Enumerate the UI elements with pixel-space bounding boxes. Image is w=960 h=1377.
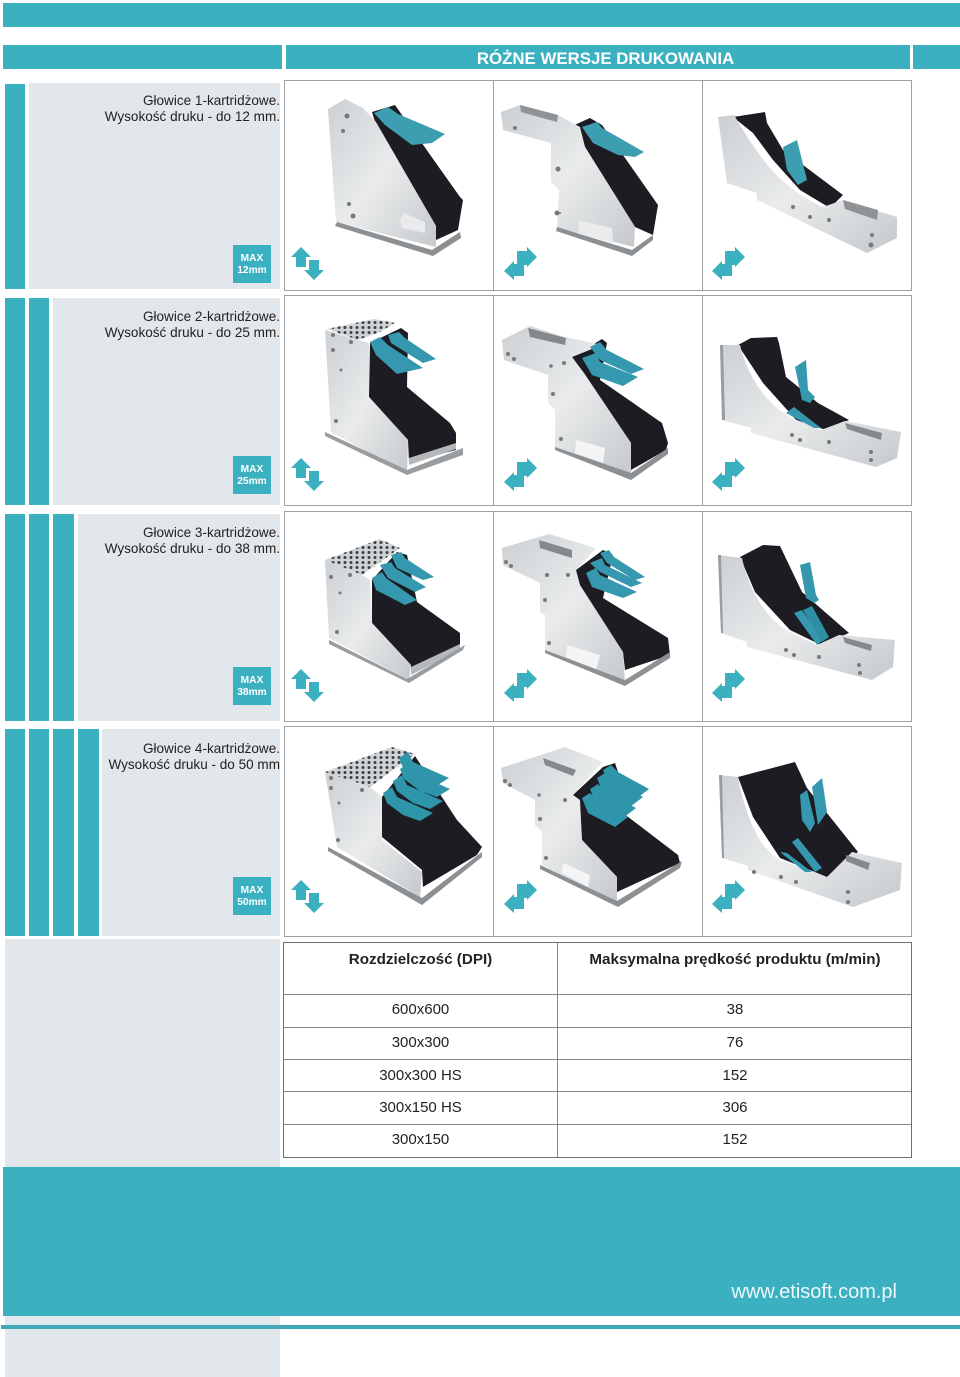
speed value: 152 bbox=[722, 1131, 748, 1148]
row 2 MAX badge: 25mm bbox=[237, 476, 267, 487]
column divider bbox=[557, 943, 558, 1157]
resolution value: 300x150 HS bbox=[379, 1099, 462, 1116]
row 1 MAX badge: MAX bbox=[241, 253, 263, 264]
footer band with website bbox=[3, 1167, 960, 1316]
resolution value: 300x300 HS bbox=[379, 1067, 462, 1084]
row 2 text bbox=[104, 309, 280, 340]
row 3 text: Głowice 3-kartridżowe. bbox=[143, 525, 280, 540]
row 1 text bbox=[104, 93, 280, 124]
print head photo bbox=[718, 112, 897, 253]
table row 5 bbox=[284, 1124, 911, 1157]
icon: horizontal arrows bbox=[712, 880, 745, 913]
bottom left grey strip bbox=[5, 1316, 280, 1377]
header bar left bbox=[3, 45, 282, 69]
print head photo bbox=[501, 747, 682, 907]
row 3 text: Wysokość druku - do 38 mm. bbox=[105, 541, 280, 556]
title: RÓŻNE WERSJE DRUKOWANIA: RÓŻNE WERSJE DRUKOWANIA bbox=[477, 49, 734, 68]
cell: 3 cartridges, horizontal bbox=[493, 511, 703, 722]
icon: horizontal arrows bbox=[712, 458, 745, 491]
header: max speed: Maksymalna prędkość produktu (m/min) bbox=[589, 951, 881, 968]
row 2 text: Głowice 2-kartridżowe. bbox=[143, 309, 280, 324]
row 4 text: Wysokość druku - do 50 mm bbox=[108, 757, 280, 772]
row 3 description panel bbox=[78, 514, 280, 721]
icon: vertical arrows bbox=[291, 247, 324, 280]
cell: 4 cartridges, vertical bbox=[284, 726, 494, 937]
row 3 text bbox=[104, 525, 280, 556]
icon: horizontal arrows bbox=[712, 247, 745, 280]
print head photo bbox=[325, 319, 463, 475]
row 1 cartridge stripes bbox=[5, 84, 25, 289]
row 2 cartridge stripes bbox=[5, 298, 49, 505]
speed value: 38 bbox=[727, 1001, 743, 1018]
speed value: 152 bbox=[722, 1067, 748, 1084]
print head photo bbox=[720, 337, 901, 467]
icon: horizontal arrows bbox=[504, 247, 537, 280]
table row 1 bbox=[284, 994, 911, 1027]
title: RÓŻNE WERSJE DRUKOWANIA bbox=[286, 45, 910, 69]
print head photo bbox=[502, 534, 670, 686]
table: resolution and product speed bbox=[283, 942, 912, 1158]
row 1 MAX badge: 12mm bbox=[237, 265, 267, 276]
cell: 1 cartridge, curved bbox=[702, 80, 912, 291]
cell: 1 cartridge, horizontal bbox=[493, 80, 703, 291]
row 4 MAX badge: MAX bbox=[241, 885, 263, 896]
speed value: 306 bbox=[722, 1099, 748, 1116]
header: resolution: Rozdzielczość (DPI) bbox=[349, 951, 492, 968]
print head photo bbox=[328, 99, 463, 256]
icon: vertical arrows bbox=[291, 669, 324, 702]
icon: horizontal arrows bbox=[504, 669, 537, 702]
row 3 MAX badge bbox=[233, 667, 271, 705]
icon: horizontal arrows bbox=[504, 458, 537, 491]
lower left grey panel bbox=[5, 939, 280, 1167]
row 3 MAX badge: MAX bbox=[241, 675, 263, 686]
row 3 MAX badge: 38mm bbox=[237, 687, 267, 698]
icon: horizontal arrows bbox=[712, 669, 745, 702]
table row 3 bbox=[284, 1059, 911, 1091]
print head photo bbox=[502, 326, 668, 480]
row 4 cartridge stripes bbox=[5, 729, 99, 936]
resolution value: 600x600 bbox=[392, 1001, 449, 1018]
row 4 MAX badge bbox=[233, 877, 271, 915]
icon: vertical arrows bbox=[291, 458, 324, 491]
row 1 text: Wysokość druku - do 12 mm. bbox=[105, 109, 280, 124]
print head photo bbox=[325, 539, 465, 683]
cell: 2 cartridges, curved bbox=[702, 295, 912, 506]
row 2 text: Wysokość druku - do 25 mm. bbox=[105, 325, 280, 340]
row 4 text bbox=[108, 741, 280, 772]
row 4 MAX badge: 50mm bbox=[237, 897, 267, 908]
website address: www.etisoft.com.pl bbox=[731, 1281, 897, 1303]
footer line bbox=[1, 1325, 960, 1329]
cell: 2 cartridges, vertical bbox=[284, 295, 494, 506]
cell: 4 cartridges, curved bbox=[702, 726, 912, 937]
row 2 MAX badge bbox=[233, 456, 271, 494]
resolution value: 300x300 bbox=[392, 1034, 449, 1051]
print head photo bbox=[325, 747, 482, 905]
cell: 3 cartridges, curved bbox=[702, 511, 912, 722]
cell: 4 cartridges, horizontal bbox=[493, 726, 703, 937]
row 3 cartridge stripes bbox=[5, 514, 74, 721]
speed value: 76 bbox=[727, 1034, 743, 1051]
row 2 MAX badge: MAX bbox=[241, 464, 263, 475]
row 2 description panel bbox=[53, 298, 280, 505]
row 4 text: Głowice 4-kartridżowe. bbox=[143, 741, 280, 756]
row 4 description panel bbox=[102, 729, 280, 936]
cell: 1 cartridge, vertical bbox=[284, 80, 494, 291]
row 1 MAX badge bbox=[233, 245, 271, 283]
row 1 description panel bbox=[29, 83, 280, 289]
icon: vertical arrows bbox=[291, 880, 324, 913]
icon: horizontal arrows bbox=[504, 880, 537, 913]
table row 4 bbox=[284, 1091, 911, 1124]
top bar bbox=[3, 3, 960, 27]
table row 2 bbox=[284, 1027, 911, 1059]
print head photo bbox=[718, 545, 895, 680]
cell: 3 cartridges, vertical bbox=[284, 511, 494, 722]
print head photo bbox=[501, 105, 658, 256]
header bar right bbox=[913, 45, 960, 69]
row 1 text: Głowice 1-kartridżowe. bbox=[143, 93, 280, 108]
resolution value: 300x150 bbox=[392, 1131, 449, 1148]
print head photo bbox=[719, 762, 902, 907]
cell: 2 cartridges, horizontal bbox=[493, 295, 703, 506]
